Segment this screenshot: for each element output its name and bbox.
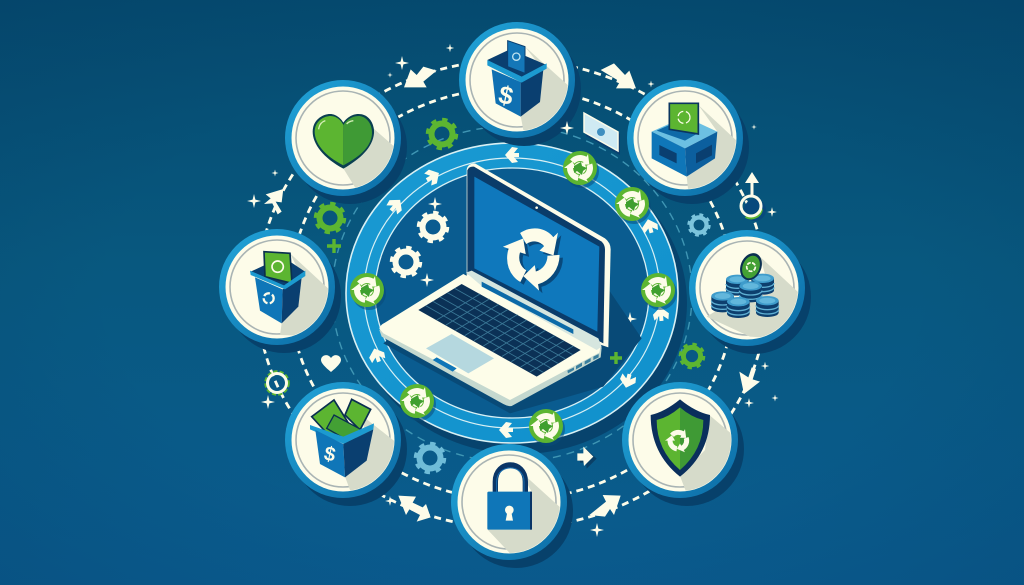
arrow: bottom right [589,495,621,517]
green plus left [327,239,341,253]
green plus inside ring [610,352,622,364]
badge: donation box with dollar: $ [496,81,516,111]
badge: deposit box [627,80,749,204]
central ring [346,143,687,454]
arrow: right down [739,367,760,394]
badge: bin full of cash [285,382,410,506]
arrow: left up [264,189,283,214]
heart icon [321,355,341,372]
ports [567,354,599,373]
badge: coin stacks [689,230,811,354]
recycling badges on ring [350,151,677,446]
sparkles [247,44,778,537]
green and blue gears [316,120,709,472]
badge: green heart [285,80,413,204]
arrow: bottom left [398,496,431,522]
ring arrows [367,147,669,438]
laptop screen [467,163,611,347]
dashed orbit paths [257,60,767,528]
arrow: top right [601,63,636,88]
badge: bin full of cash: $ [322,443,337,467]
arrow: top left [404,67,437,87]
laptop base [379,271,602,406]
keyboard [418,284,581,377]
laptop shadow [383,273,642,413]
ring symbol with up arrow [741,172,766,221]
banknote icon [584,113,620,155]
green ring with white centre [266,372,288,394]
badge: padlock [451,444,573,568]
badge: recycling shield [622,382,747,506]
badge: recycling bin with note [219,229,341,353]
badge: donation box with dollar [459,22,581,146]
laptop [379,163,642,413]
trackpad [426,334,494,373]
flow arrows [264,63,760,522]
arrow: small bottom [577,447,597,469]
white gears and sparkles inside ring [392,197,637,326]
